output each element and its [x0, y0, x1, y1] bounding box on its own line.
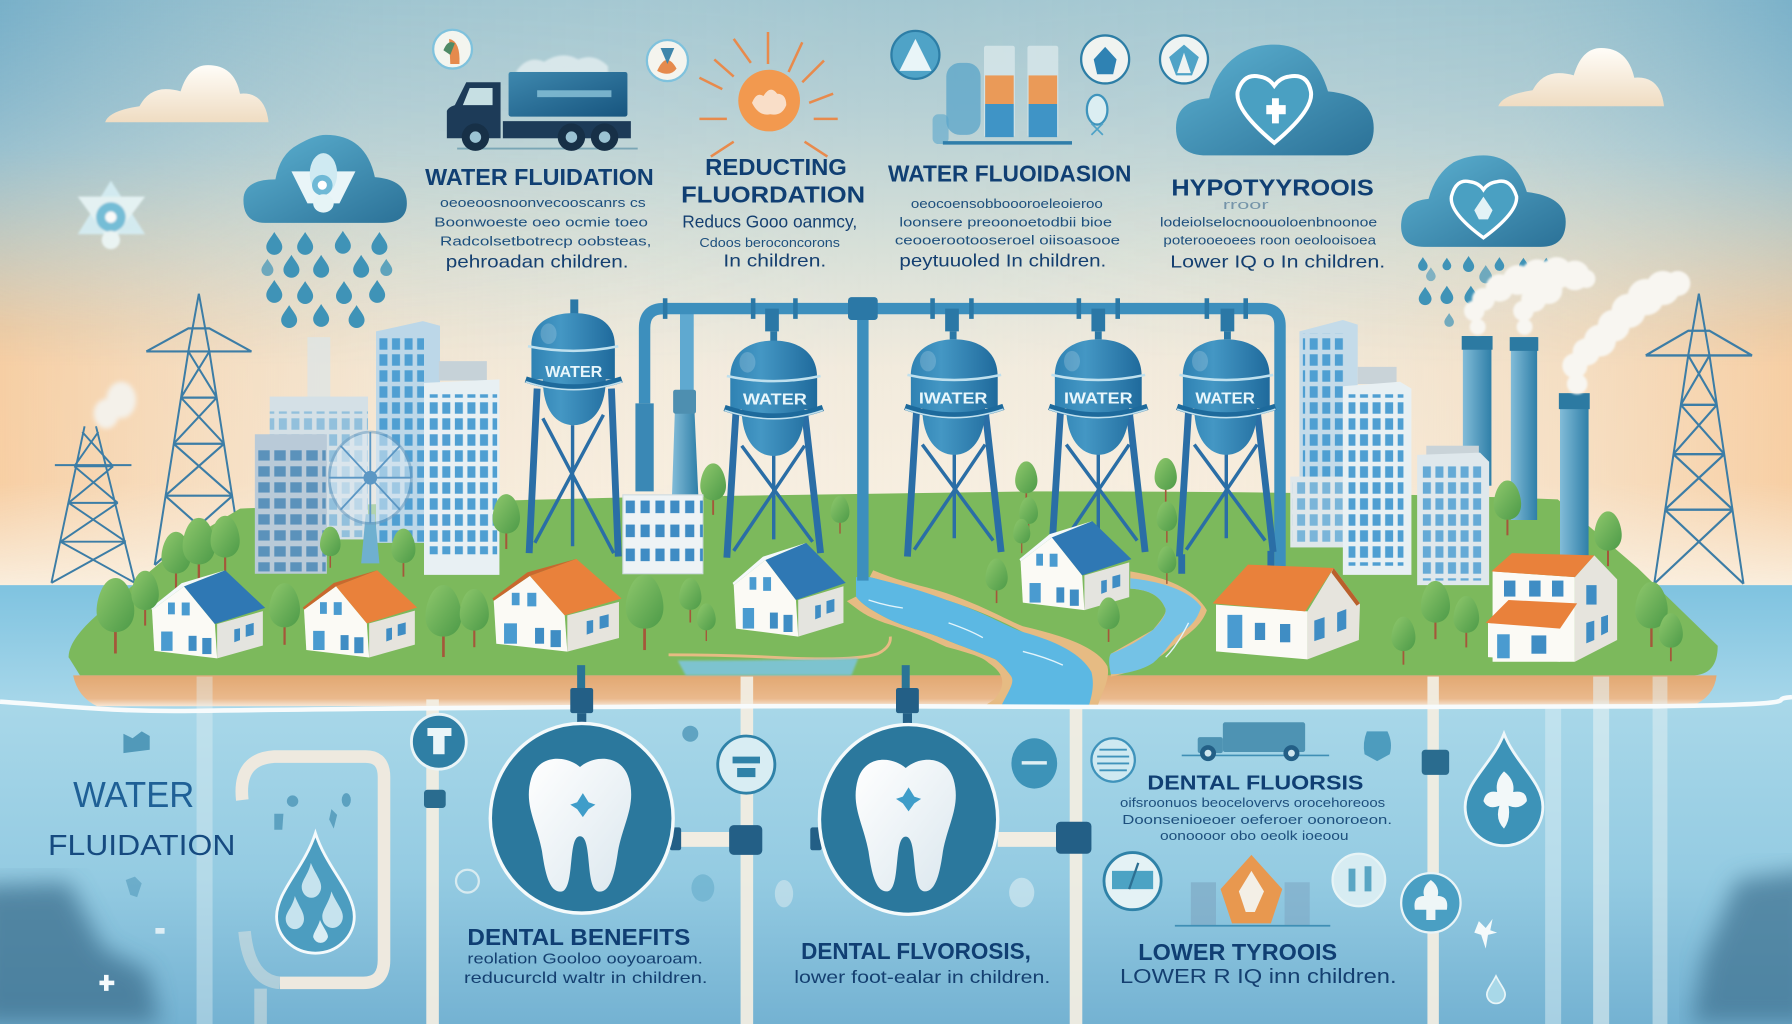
text: water fluoidasion column: ceooerootooseroel oiisoasooe: [895, 234, 1120, 248]
front trees: [97, 571, 1683, 665]
icon: balloon badge: [1011, 738, 1057, 789]
pipe network: [645, 297, 1280, 581]
text: dental flvorosis: DENTAL FLVOROSIS,: [801, 938, 1031, 964]
text: water fluidation left: WATER: [73, 774, 194, 815]
text: dental fluorsis: [1120, 772, 1392, 843]
text: dental fluorsis: oifsroonuos beocelovervs orocehoreoos: [1120, 796, 1385, 810]
text: hypotyyroois column: rroor: [1223, 198, 1269, 212]
icon: big cloud with heart: [1176, 45, 1374, 155]
text: water fluidation left: [48, 774, 235, 862]
icon: badge person: [1081, 35, 1129, 83]
text: reducting fluordation column: Reducs Gooo oanmcy,: [682, 211, 857, 231]
background trees: [493, 458, 1521, 549]
island ground: [69, 491, 1718, 675]
water tower 3: IWATER: [919, 390, 988, 407]
text: dental benefits: DENTAL BENEFITS: [467, 924, 690, 950]
rain drops left: [261, 231, 392, 328]
icon: small truck: [1182, 722, 1329, 761]
trees behind houses: [161, 511, 1622, 603]
text: hypotyyroois column: lodeiolselocnoouoloenbnoonoe: [1160, 215, 1377, 229]
text: dental fluorsis: DENTAL FLUORSIS: [1147, 772, 1363, 795]
island soil: [73, 675, 1717, 706]
text: water fluidation column: oeoeoosnoonvecooscanrs cs: [440, 196, 646, 210]
text: reducting fluordation column: [681, 154, 865, 270]
horizontal connectors: [424, 750, 1449, 855]
icon: striped badge: [1091, 738, 1135, 782]
factory chimneys: [1462, 336, 1590, 555]
water tower 4: IWATER: [1064, 390, 1133, 407]
river: [669, 570, 1207, 709]
text: reducting fluordation column: In children.: [723, 250, 826, 270]
icon: test tubes and bottle: [933, 46, 1072, 144]
house: orange two storey: [1486, 553, 1617, 662]
icon: water drop: [277, 833, 354, 953]
text: water fluidation left: FLUIDATION: [48, 830, 235, 862]
icon: small white star: [1474, 919, 1497, 949]
small faint icons: [123, 726, 1034, 934]
chimney smoke: [1464, 257, 1690, 394]
icon: valve right: [896, 665, 919, 723]
rain drops right: [1418, 256, 1551, 327]
icon: small badge 2: [647, 40, 688, 81]
icon: small balloon: [1364, 731, 1391, 761]
icon: sparkle cross: [99, 975, 114, 991]
text: water fluoidasion column: oeocoensobboooroeleoieroo: [911, 197, 1103, 211]
sky background: [0, 0, 1792, 594]
icon: valve left: [570, 665, 593, 723]
water tower 1: WATER: [545, 364, 603, 381]
water tower 5: [1177, 339, 1275, 574]
text: water fluidation column: Radcolsetbotrecp oobsteas,: [440, 235, 651, 249]
text: water fluoidasion column: [888, 161, 1131, 270]
text: dental fluorsis: Doonsenioeoer oeferoer oonoroeon.: [1122, 813, 1392, 827]
water tower 2: WATER: [743, 392, 807, 409]
icon: round flower badge: [1401, 873, 1461, 933]
text: water fluoidasion column: peytuuoled In children.: [899, 250, 1106, 270]
text: dental flvorosis: [794, 938, 1050, 987]
cloud: cream right: [1498, 48, 1664, 106]
icon: small medal: [1087, 95, 1107, 135]
vertical pipes: [197, 677, 1667, 1024]
text: reducting fluordation column: Cdoos beroconcorons: [699, 236, 840, 250]
water tower 2: [725, 341, 823, 558]
tooth circle 2: [819, 725, 998, 914]
icon: star badge: [78, 181, 145, 249]
icon: small badge 1: [433, 30, 472, 69]
text: reducting fluordation column: FLUORDATION: [681, 181, 865, 207]
icon: stripe badge lower: [1104, 853, 1161, 910]
text: dental fluorsis: oonoooor obo oeolk ioeoou: [1160, 829, 1349, 843]
houses: [151, 521, 1617, 662]
text: water fluidation column: pehroadan children.: [446, 251, 629, 271]
left buildings: [255, 321, 499, 575]
text: dental benefits: [464, 924, 707, 987]
icon: badge triangle: [1160, 35, 1208, 83]
cloud: cream left: [105, 65, 269, 122]
text: lower tyroois: LOWER TYROOIS: [1138, 939, 1337, 965]
water tower 5: WATER: [1195, 390, 1255, 407]
right background buildings: [1290, 320, 1358, 547]
text: hypotyyroois column: Lower IQ o In children.: [1170, 251, 1385, 271]
house: orange wide: [1213, 565, 1360, 659]
text: dental benefits: reducurcld waltr in children.: [464, 970, 707, 987]
text: water fluoidasion column: WATER FLUOIDASION: [888, 161, 1131, 187]
pylons: [51, 294, 1752, 584]
text: water fluidation column: Boonwoeste oeo ocmie toeo: [434, 215, 648, 229]
icon: sun with rays: [699, 32, 838, 157]
icon: blue cloud with badge: [243, 135, 407, 223]
lower panel background: [0, 697, 1792, 1024]
water tower 3: [905, 339, 1003, 557]
right foreground buildings: [1343, 367, 1489, 585]
tooth circle 1: [490, 723, 673, 913]
sea: [0, 585, 1792, 711]
text: water fluoidasion column: loonsere preoonoetodbii bioe: [899, 215, 1112, 229]
icon: right cloud with heart: [1401, 155, 1566, 247]
text: dental benefits: reolation Gooloo ooyoaroam.: [467, 951, 703, 967]
center building with stack and pipes: [623, 313, 703, 574]
icon: large drop with flower: [1465, 734, 1543, 846]
text: water fluidation column: WATER FLUIDATION: [425, 164, 654, 190]
text: dental flvorosis: lower foot-ealar in children.: [794, 967, 1050, 987]
water tower 4: [1049, 339, 1147, 557]
wind wheel: [329, 432, 411, 563]
icon: badge middle: [718, 736, 775, 793]
water tower 1: [526, 299, 622, 557]
icon: truck: [447, 55, 638, 151]
text: reducting fluordation column: REDUCTING: [705, 154, 847, 180]
icon: faded badge right: [1333, 854, 1385, 906]
icon: badge star: [891, 31, 939, 79]
text: hypotyyroois column: HYPOTYYROOIS: [1171, 174, 1374, 200]
text: lower tyroois: [1120, 939, 1397, 988]
text: hypotyyroois column: [1160, 174, 1385, 271]
water towers: [526, 299, 1275, 574]
icon: small outline drop: [1487, 976, 1505, 1003]
small chimney smoke left: [94, 382, 136, 429]
icon: badge upper left: [411, 714, 466, 769]
text: water fluidation column: [425, 164, 654, 271]
U shaped pipe: [242, 757, 384, 1024]
shoreline wave line: [0, 697, 1792, 711]
text: hypotyyroois column: poterooeoees roon oeolooisoea: [1163, 234, 1376, 248]
text: lower tyroois: LOWER R IQ inn children.: [1120, 965, 1397, 988]
icon: orange shield with buildings: [1175, 855, 1330, 926]
